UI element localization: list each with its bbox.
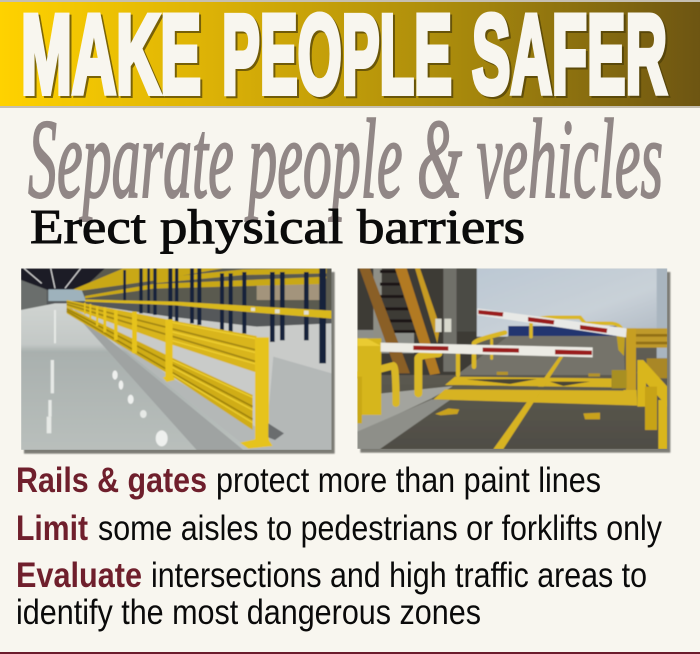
bottom rule bbox=[0, 652, 700, 654]
shelf contents bbox=[82, 268, 332, 310]
photo: yellow guard rail along warehouse aisle bbox=[21, 268, 335, 454]
rail upper bbox=[67, 300, 257, 373]
bullet: evaluate intersections: Evaluate bbox=[16, 556, 142, 595]
bullet: rails and gates: protect more than paint lines bbox=[216, 461, 601, 500]
bullet: rails and gates bbox=[16, 461, 601, 500]
rail lower bbox=[67, 307, 253, 430]
bullet: rails and gates: Rails & gates bbox=[16, 461, 207, 500]
title text bbox=[21, 0, 669, 119]
bullet: evaluate intersections: identify the most dangerous zones bbox=[16, 593, 481, 632]
bullet: evaluate intersections bbox=[16, 556, 647, 632]
heading: erect physical barriers: Erect physical barriers bbox=[30, 199, 525, 254]
title banner bbox=[0, 0, 700, 119]
bullet: limit aisles: Limit bbox=[16, 509, 88, 548]
photo: barrier gates and painted yellow floor bbox=[357, 268, 670, 453]
bullet list bbox=[16, 461, 662, 632]
